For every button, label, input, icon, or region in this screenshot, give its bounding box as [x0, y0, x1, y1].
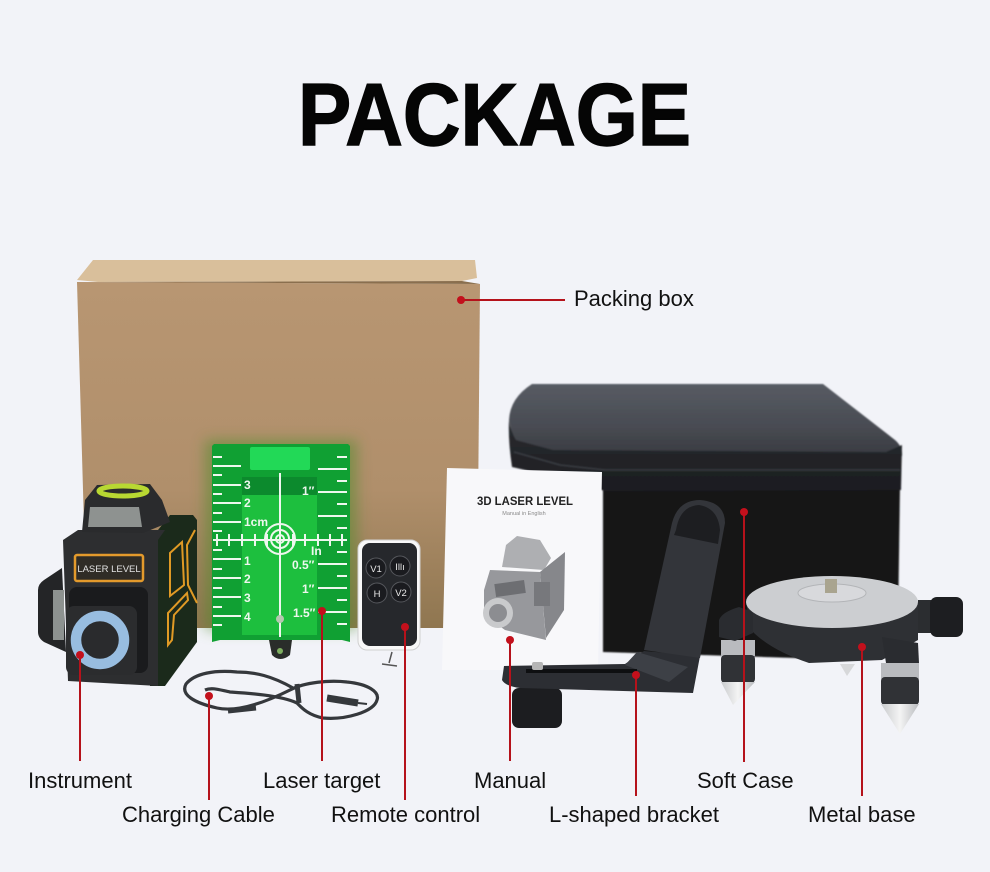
ruler numerals: In [311, 544, 322, 558]
light center zone [242, 495, 317, 635]
middle tip [840, 664, 855, 676]
ruler numerals: 1cm [244, 515, 268, 529]
bracket slot [526, 669, 637, 673]
target plate [212, 444, 350, 659]
ruler numerals: 3 [244, 591, 251, 605]
ruler ticks [213, 457, 241, 625]
manual illustration [483, 536, 565, 640]
ruler numerals: 4 [244, 610, 251, 624]
left foot [721, 640, 755, 705]
base side [746, 602, 918, 663]
button labels: Illı [395, 562, 405, 573]
label: L-shaped bracket: L-shaped bracket [549, 802, 719, 827]
button labels: H [374, 589, 381, 600]
hanging tab [269, 640, 292, 659]
right foot [881, 663, 919, 734]
manual subtitle: Manual in English [502, 511, 546, 517]
dark band [242, 477, 317, 495]
buttons [366, 556, 411, 603]
raised centre [798, 584, 866, 602]
center hole [276, 615, 284, 623]
top tab [250, 447, 310, 470]
button labels [370, 562, 407, 600]
remote control [358, 540, 420, 666]
bracket flap [625, 652, 688, 682]
bracket base [502, 651, 700, 693]
packing box [77, 260, 480, 630]
ruler numerals: 1″ [302, 582, 315, 596]
disc [746, 576, 918, 628]
callouts [80, 300, 862, 800]
laser level badge: LASER LEVEL [77, 564, 141, 575]
keyhole slot [674, 505, 720, 544]
L-shaped bracket [502, 500, 725, 728]
ruler numerals: 2 [244, 572, 251, 586]
metal base [719, 576, 963, 734]
top head [82, 484, 170, 533]
front body [63, 530, 165, 686]
ruler numerals: 1″ [302, 484, 315, 498]
bracket upright [644, 500, 725, 658]
top lime ring [99, 486, 147, 496]
blue ring [76, 616, 124, 664]
manual heading: 3D LASER LEVEL [477, 494, 573, 508]
charging cable [185, 671, 377, 718]
green glow [205, 440, 357, 630]
label: metal base: Metal base [808, 802, 916, 827]
laser level badge [75, 555, 143, 581]
ruler numerals: 2 [244, 496, 251, 510]
ruler numerals: 0.5″ [292, 558, 315, 572]
label: laser target: Laser target [263, 768, 380, 793]
left lobe [719, 607, 753, 641]
instrument [38, 484, 197, 686]
box face [77, 282, 480, 628]
ruler numerals [244, 478, 322, 624]
side panel [150, 515, 197, 686]
screw [532, 662, 543, 670]
front module [66, 587, 148, 675]
case lid [509, 384, 902, 456]
ruler numerals: 3 [244, 478, 251, 492]
button labels: V2 [395, 588, 407, 599]
centre screw [825, 579, 837, 593]
soft case [509, 384, 902, 660]
title: PACKAGE [298, 65, 691, 164]
case body [603, 485, 900, 660]
box flap [77, 260, 477, 282]
label: manual: Manual [474, 768, 546, 793]
label: packing box: Packing box [574, 286, 694, 311]
top glass [88, 507, 142, 527]
bracket knob [512, 688, 562, 728]
ruler numerals: 1.5″ [293, 606, 316, 620]
key ring [382, 652, 397, 666]
callout dots [76, 296, 866, 700]
label: soft case: Soft Case [697, 768, 794, 793]
label: remote control: Remote control [331, 802, 480, 827]
crosshair [265, 524, 295, 554]
manual [442, 468, 602, 670]
label: charging cable: Charging Cable [122, 802, 275, 827]
button labels: V1 [370, 564, 382, 575]
ruler numerals: 1 [244, 554, 251, 568]
knob [918, 597, 963, 637]
left side handle [38, 568, 66, 652]
label: instrument: Instrument [28, 768, 132, 793]
right lobe [882, 637, 919, 663]
orange side marks [168, 530, 197, 645]
case zipper [509, 420, 902, 491]
